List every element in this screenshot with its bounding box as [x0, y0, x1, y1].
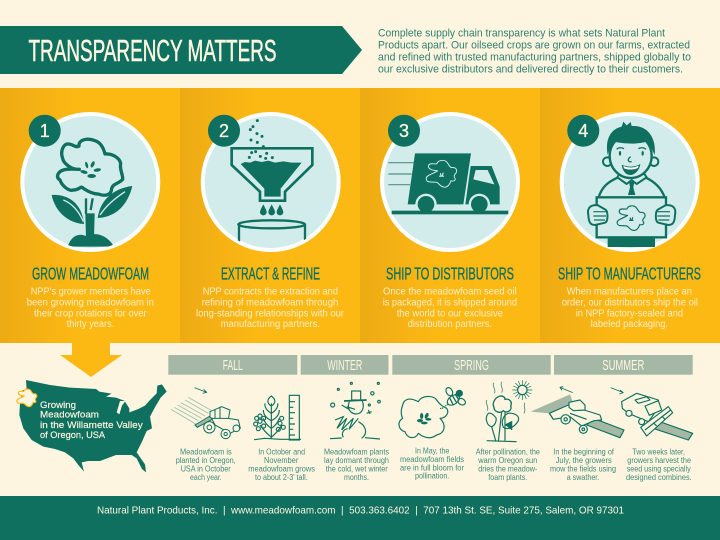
- summer text: swathing: mow the fields using: [550, 464, 616, 474]
- step number 4: 4: [578, 121, 588, 141]
- intro text block: Products apart. Our oilseed crops are grown on our farms, extracted: [378, 40, 690, 52]
- description: thirty years.: [67, 319, 114, 330]
- description: [27, 286, 154, 330]
- step number 1: [29, 115, 61, 147]
- arrow pointing to map: [60, 343, 122, 377]
- season header: spring: [392, 355, 551, 375]
- description: the world to our exclusive: [397, 308, 503, 320]
- spring text: drying: warm Oregon sun: [477, 456, 537, 465]
- fall text: growth: November: [264, 456, 299, 465]
- spring text: drying: After pollination, the: [476, 448, 540, 456]
- summer text: swathing: a swather.: [567, 473, 599, 482]
- season header: winter: WINTER: [327, 358, 362, 374]
- intro text block: and refined with trusted manufacturing partners, shipped globally to: [378, 52, 691, 64]
- description: [383, 286, 517, 330]
- contact line: Natural Plant Products, Inc. | www.meadowfoam.com | 503.363.6402 | 707 13th St. SE, Suite 275, Salem, OR 97301: [97, 504, 624, 516]
- heading: EXTRACT & REFINE: [221, 264, 320, 284]
- intro text block: our exclusive distributors and delivered directly to their customers.: [378, 64, 683, 76]
- description: labeled packaging.: [591, 319, 668, 330]
- title banner: [0, 26, 362, 74]
- fall text: growth: meadowfoam grows: [248, 464, 315, 474]
- map caption: in the Willamette Valley: [40, 420, 143, 431]
- winter text: [324, 448, 389, 482]
- winter text: the cold, wet winter: [326, 464, 388, 474]
- map of the United States: [19, 380, 167, 472]
- panel: step 4 ship to manufacturers: [558, 114, 701, 330]
- step number 4: [567, 115, 599, 147]
- spring text: drying: foam plants.: [488, 473, 527, 482]
- summer text: swathing: July, the growers: [556, 456, 612, 465]
- fall text: planting: each year.: [190, 473, 222, 482]
- map caption: Meadowfoam: [40, 410, 99, 421]
- map caption: of Oregon, USA: [40, 430, 106, 441]
- summer text: harvesting: [626, 448, 692, 482]
- fall text: growth: [248, 448, 315, 482]
- spring text: bloom: pollination.: [415, 472, 449, 481]
- panel: four process steps background: [0, 88, 720, 343]
- map caption: [40, 400, 143, 441]
- description: in NPP factory-sealed and: [576, 308, 683, 320]
- description: is packaged, it is shipped around: [383, 298, 517, 308]
- fall text: planting: [176, 448, 236, 482]
- winter text: Meadowfoam plants: [324, 448, 389, 456]
- intro text block: [378, 28, 691, 76]
- icon: funnel in circle: [203, 114, 339, 250]
- icon: snowman: [330, 382, 380, 439]
- step number 1: 1: [40, 121, 50, 141]
- panel: step 2 extract and refine: [196, 114, 345, 330]
- panel: USA map: [17, 380, 167, 472]
- heading: SHIP TO DISTRIBUTORS: [386, 264, 514, 284]
- step number 2: [208, 115, 240, 147]
- description: Once the meadowfoam seed oil: [383, 286, 517, 298]
- icon: swather: [531, 387, 624, 438]
- spring text: bloom: meadowfoam fields: [400, 455, 464, 464]
- heading: GROW MEADOWFOAM: [32, 264, 149, 284]
- description: been growing meadowfoam in: [27, 298, 154, 308]
- season header: summer: SUMMER: [602, 358, 644, 374]
- fall text: planting: USA in October: [181, 464, 231, 474]
- icon: flower with bee: [399, 386, 467, 438]
- season header: fall: FALL: [223, 358, 243, 374]
- icon: planting tractor: [171, 388, 240, 439]
- summer text: harvesting: Two weeks later,: [632, 448, 685, 456]
- map caption: Growing: [40, 400, 76, 411]
- footer: [0, 496, 720, 540]
- icon: drying plants and sun: [486, 380, 532, 442]
- summer text: swathing: [550, 448, 616, 482]
- step number 2: 2: [219, 121, 229, 141]
- summer text: harvesting: seed using specially: [627, 464, 691, 474]
- description: order, our distributors ship the oil: [562, 298, 698, 308]
- season header: fall: [168, 355, 297, 375]
- fall text: growth: In October and: [258, 448, 305, 456]
- spring text: drying: dries the meadow-: [478, 464, 538, 474]
- step number 3: 3: [399, 121, 409, 141]
- description: their crop rotations for over: [34, 308, 147, 320]
- summer text: harvesting: designed combines.: [626, 473, 692, 482]
- spring text: bloom: [400, 446, 464, 481]
- icon: delivery truck in circle: [382, 114, 518, 250]
- description: [196, 286, 345, 330]
- fall text: growth: to about 2-3' tall.: [255, 473, 308, 482]
- spring text: bloom: In May, the: [415, 446, 450, 456]
- icon: combine harvester: [611, 388, 693, 440]
- description: distribution partners.: [408, 319, 492, 330]
- step number 3: [388, 115, 420, 147]
- spring text: drying: [476, 448, 540, 482]
- panel: step 3 ship to distributors: [382, 114, 518, 330]
- fall text: planting: planted in Oregon,: [176, 456, 236, 465]
- description: [562, 286, 698, 330]
- winter text: lay dormant through: [324, 456, 389, 465]
- description: NPP's grower members have: [31, 286, 151, 298]
- winter text: months.: [344, 473, 369, 482]
- description: refining of meadowfoam through: [202, 298, 338, 308]
- season header: summer: [554, 355, 693, 375]
- icon: man holding box in circle: [562, 114, 698, 250]
- panel: step 1 grow meadowfoam: [22, 114, 158, 330]
- fall text: planting: Meadowfoam is: [180, 448, 232, 456]
- season header: winter: [301, 355, 388, 375]
- summer text: swathing: In the beginning of: [553, 448, 615, 456]
- spring text: bloom: are in full bloom for: [400, 463, 464, 472]
- icon: flower in circle: [22, 114, 158, 250]
- icon: Oregon flower marker: [17, 389, 37, 407]
- description: long-standing relationships with our: [196, 308, 345, 320]
- description: When manufacturers place an: [567, 286, 692, 298]
- description: NPP contracts the extraction and: [203, 286, 338, 298]
- summer text: harvesting: growers harvest the: [627, 456, 691, 465]
- intro text block: Complete supply chain transparency is what sets Natural Plant: [378, 28, 665, 40]
- title: TRANSPARENCY MATTERS: [28, 34, 276, 68]
- icon: plant with ruler: [254, 395, 301, 440]
- description: manufacturing partners.: [221, 319, 320, 330]
- season header: spring: SPRING: [454, 358, 489, 374]
